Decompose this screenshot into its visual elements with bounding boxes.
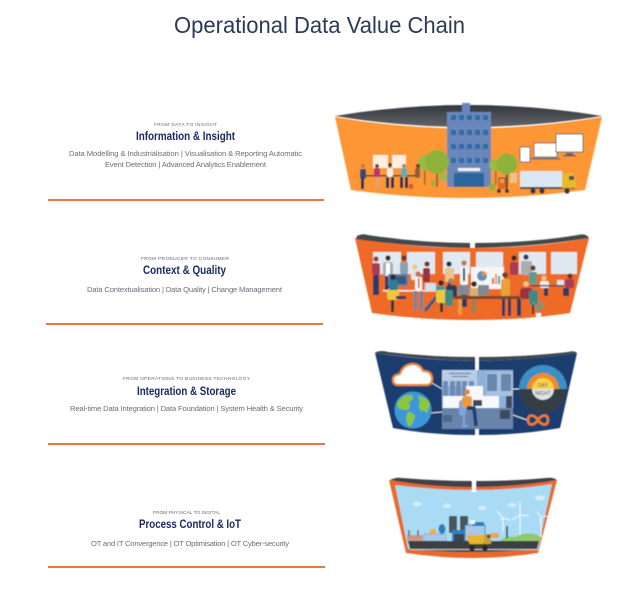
icon: globe: [394, 392, 432, 428]
server room: [442, 370, 513, 429]
eyebrow: FROM PHYSICAL TO DIGITAL: [153, 510, 220, 516]
panel: integration and storage text: [70, 376, 303, 413]
dump truck: [466, 534, 491, 551]
people: [372, 254, 574, 307]
meeting scene: [360, 155, 420, 189]
eyebrow: FROM PRODUCER TO CONSUMER: [141, 256, 230, 262]
bowl body: [335, 117, 602, 198]
bowl body: [375, 353, 577, 435]
desk scene: [383, 271, 453, 312]
clouds: [412, 496, 545, 510]
devices: [520, 134, 583, 162]
windows: [373, 252, 577, 274]
heading: Information & Insight: [136, 129, 235, 143]
bowl rim: [356, 234, 589, 248]
panel: context and quality text: [87, 256, 283, 294]
whiteboard: [471, 267, 504, 289]
description: Data Modelling & Industrialisation | Visualisation & Reporting Automatic: [69, 149, 302, 158]
bowl body: [355, 238, 589, 320]
truck: [520, 171, 576, 194]
description: OT and IT Convergence | OT Optimisation | OT Cyber-security: [91, 539, 289, 548]
heading: Integration & Storage: [137, 384, 236, 398]
heading: Context & Quality: [143, 263, 226, 277]
worker: [459, 389, 482, 427]
illustration: industrial bowl: [389, 475, 557, 558]
hills: [500, 533, 541, 541]
illustration: corporate bowl: [335, 103, 602, 198]
description: [69, 149, 302, 169]
forklift: [497, 173, 517, 193]
icon: day and night dial: DAY: [538, 383, 549, 389]
factory: [407, 516, 508, 541]
wind turbines: [497, 501, 547, 537]
heading: Process Control & IoT: [139, 517, 242, 531]
eyebrow: FROM DATA TO INSIGHT: [154, 122, 217, 128]
building: [447, 103, 491, 187]
title: Operational Data Value Chain: [174, 12, 465, 38]
meeting table: [445, 272, 544, 318]
description: Data Contextualisation | Data Quality | Change Management: [87, 285, 283, 294]
eyebrow: FROM OPERATIONS TO BUSINESS TECHNOLOGY: [123, 376, 251, 382]
icon: day and night dial: [519, 365, 567, 413]
illustration: team bowl: [355, 234, 589, 320]
trees: [418, 150, 518, 190]
center notch: [472, 475, 476, 492]
connector lines: [431, 383, 527, 420]
description: Event Detection | Advanced Analytics Enablement: [105, 160, 267, 169]
sky: [395, 484, 552, 552]
icon: infinity loop: [528, 416, 548, 424]
illustration: technology bowl: [375, 351, 577, 435]
description: Real-time Data Integration | Data Foundation | System Health & Security: [70, 404, 303, 413]
bowl frame: [389, 480, 557, 558]
road: [408, 541, 539, 552]
panel: information and insight text: [69, 122, 302, 169]
bowl rim: [335, 105, 602, 127]
icon: day and night dial: NIGHT: [535, 391, 551, 397]
panel: process control text: [91, 510, 289, 548]
bowl rim: [390, 478, 557, 487]
bowl rim: [375, 351, 577, 361]
icon: cloud: [393, 364, 432, 385]
